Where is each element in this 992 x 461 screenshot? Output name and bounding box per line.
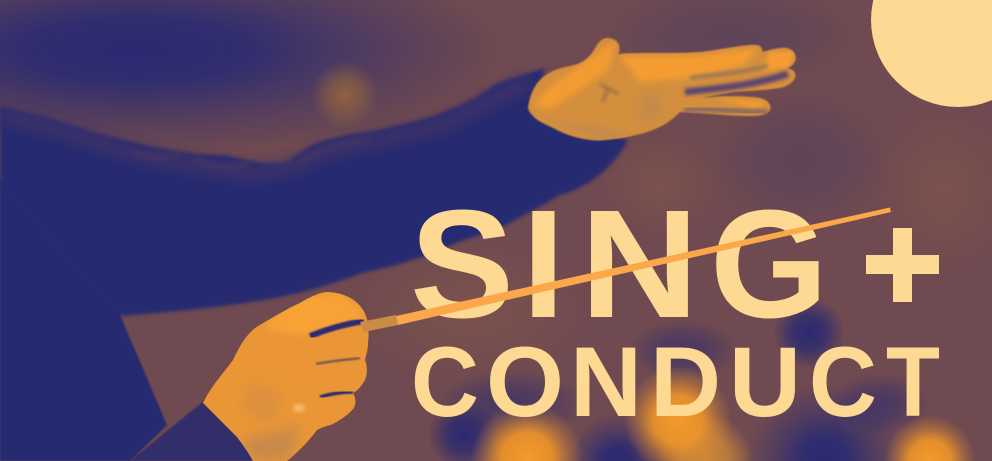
lower sleeve xyxy=(130,401,256,461)
title: SING +: S xyxy=(410,178,514,350)
title: CONDUCT: C xyxy=(809,326,877,437)
baton xyxy=(360,208,891,332)
title: SING +: I xyxy=(522,178,565,350)
title: CONDUCT: U xyxy=(729,326,801,437)
raised hand xyxy=(528,38,796,140)
torso silhouette xyxy=(0,180,167,461)
title: SING +: G xyxy=(710,178,828,350)
title: CONDUCT xyxy=(411,326,940,437)
title: SING + xyxy=(410,178,939,350)
decorative moon circle xyxy=(871,0,992,107)
title: CONDUCT: C xyxy=(411,326,479,437)
title: CONDUCT: D xyxy=(650,326,721,437)
conducting hand xyxy=(203,292,369,461)
title: CONDUCT: T xyxy=(886,326,940,437)
blurred choir background xyxy=(428,297,976,461)
upper arm sleeve xyxy=(0,68,628,316)
title: SING +: N xyxy=(580,178,699,350)
title: CONDUCT: O xyxy=(486,326,564,437)
title: CONDUCT: N xyxy=(570,326,642,437)
